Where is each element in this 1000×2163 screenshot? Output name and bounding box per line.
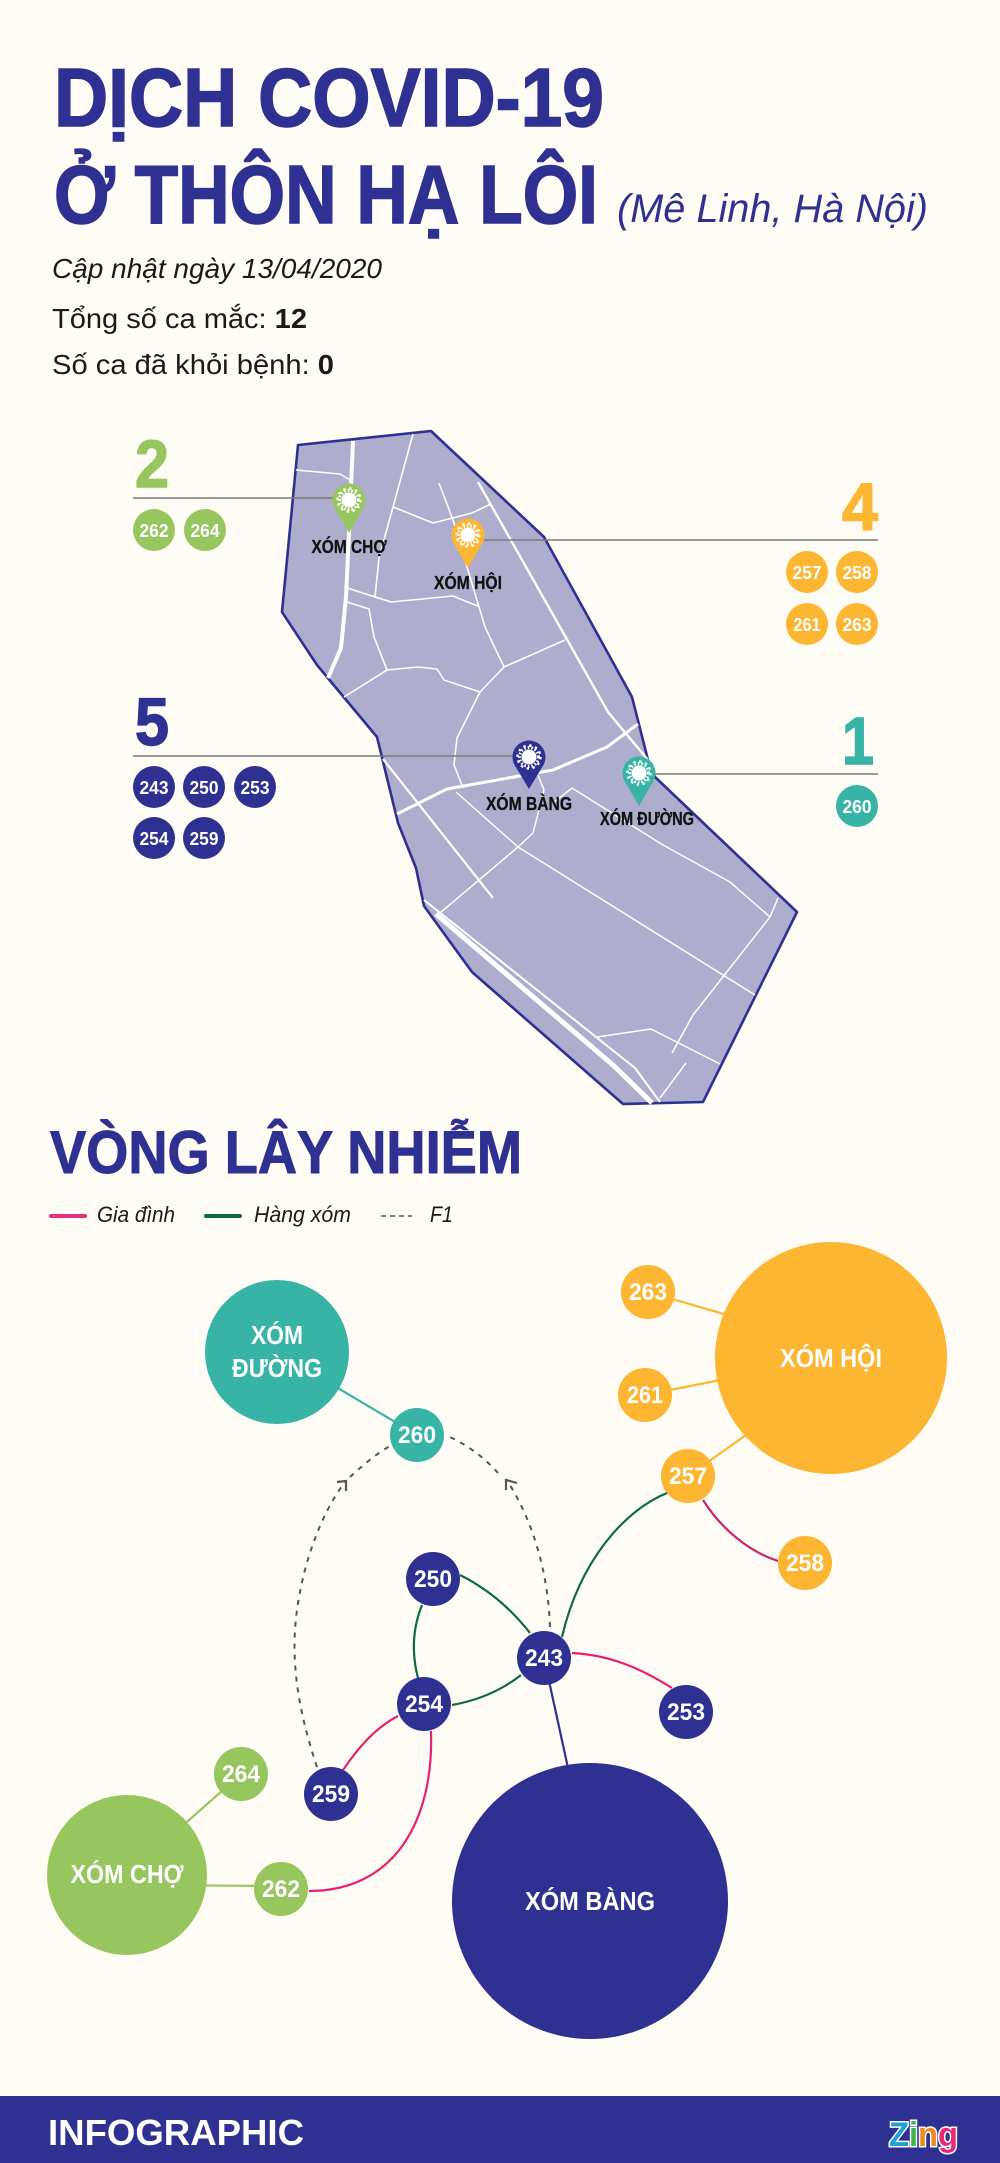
- count: Xóm Đường 1 case: 260: [842, 797, 872, 817]
- node: case 243: [517, 1631, 571, 1685]
- title: DỊCH COVID-19: [54, 51, 604, 144]
- footer band: [0, 2096, 1000, 2163]
- node: case 261: 261: [627, 1382, 663, 1409]
- node: case 264: [214, 1747, 268, 1801]
- node: case 262: 262: [262, 1876, 300, 1903]
- count: Xóm Bàng 5 cases: [133, 685, 276, 859]
- subtitle: location: (Mê Linh, Hà Nội): [617, 187, 928, 231]
- count: Xóm Chợ 2 cases: 2: [135, 427, 169, 502]
- count: Xóm Hội 4 cases: [786, 470, 878, 645]
- map panel: [133, 431, 878, 1104]
- arrow: 243 to 260: [506, 1480, 517, 1490]
- label: Xóm Hội: XÓM HỘI: [434, 572, 502, 593]
- pin: Xóm Chợ: [332, 484, 366, 533]
- node: case 253: [659, 1685, 713, 1739]
- count: Xóm Đường 1 case: 1: [842, 704, 874, 779]
- count: Xóm Chợ 2 cases: 262: [140, 521, 168, 541]
- legend: Hàng xóm: [254, 1202, 351, 1227]
- count: Xóm Bàng 5 cases: 254: [140, 829, 168, 849]
- node: case 260: [390, 1408, 444, 1462]
- pin: Xóm Bàng: [512, 741, 546, 789]
- recovered cases: Số ca đã khỏi bệnh: 0: [52, 349, 334, 380]
- node: Xóm Đường: ĐƯỜNG: [232, 1353, 322, 1383]
- node: case 258: 258: [786, 1550, 824, 1577]
- node: Xóm Đường: XÓM: [251, 1320, 303, 1350]
- node: case 263: [621, 1265, 675, 1319]
- node: case 253: 253: [667, 1699, 705, 1726]
- leader lines: [133, 498, 878, 774]
- pin: Xóm Hội: [452, 519, 484, 568]
- count: Xóm Chợ 2 cases: [133, 427, 226, 551]
- legend: Gia đình: [97, 1202, 175, 1227]
- title: [54, 51, 604, 241]
- count: Xóm Bàng 5 cases: 250: [190, 778, 218, 798]
- count: Xóm Hội 4 cases: 261: [794, 615, 820, 635]
- node: Xóm Hội: [715, 1242, 947, 1474]
- node: case 261: [618, 1368, 672, 1422]
- count: Xóm Hội 4 cases: 4: [842, 470, 878, 545]
- node: Xóm Đường: [205, 1280, 349, 1424]
- node: case 250: 250: [414, 1566, 452, 1593]
- map: roads: [296, 434, 778, 1103]
- node: Xóm Chợ: XÓM CHỢ: [70, 1859, 184, 1889]
- count: Xóm Chợ 2 cases: 264: [190, 521, 220, 541]
- footer label: INFOGRAPHIC: [48, 2112, 304, 2153]
- node: case 260: 260: [398, 1422, 436, 1449]
- count: Xóm Bàng 5 cases: 5: [135, 685, 169, 760]
- node: case 254: 254: [405, 1691, 444, 1718]
- network diagram: [47, 1242, 947, 2039]
- title: Ở THÔN HẠ LÔI: [54, 148, 598, 241]
- node: case 263: 263: [629, 1279, 667, 1306]
- arrow: 259 to 260: [337, 1481, 346, 1491]
- count: Xóm Hội 4 cases: 258: [842, 563, 872, 583]
- count: Xóm Đường 1 case: [836, 704, 878, 827]
- node: Xóm Hội: XÓM HỘI: [780, 1343, 882, 1373]
- node: case 259: 259: [312, 1781, 350, 1808]
- label: Xóm Bàng: XÓM BÀNG: [486, 793, 572, 814]
- links: [127, 1292, 831, 1891]
- node: case 259: [304, 1767, 358, 1821]
- heading: infection chain: VÒNG LÂY NHIỄM: [50, 1119, 522, 1186]
- count: Xóm Bàng 5 cases: 243: [140, 778, 168, 798]
- pin: Xóm Đường: [623, 757, 655, 806]
- node: case 264: 264: [222, 1761, 261, 1788]
- count: Xóm Bàng 5 cases: 259: [190, 829, 218, 849]
- legend: F1: [430, 1202, 453, 1227]
- count: Xóm Hội 4 cases: 257: [792, 563, 822, 583]
- update date: Cập nhật ngày 13/04/2020: [52, 253, 382, 284]
- label: Xóm Đường: XÓM ĐƯỜNG: [600, 808, 694, 829]
- node: case 257: 257: [669, 1463, 707, 1490]
- label: Xóm Chợ: XÓM CHỢ: [312, 536, 387, 557]
- node: Xóm Chợ: [47, 1795, 207, 1955]
- node: case 257: [661, 1449, 715, 1503]
- node: case 250: [406, 1552, 460, 1606]
- count: Xóm Bàng 5 cases: 253: [240, 778, 270, 798]
- count: Xóm Hội 4 cases: 263: [842, 615, 872, 635]
- node: case 254: [397, 1677, 451, 1731]
- total cases: Tổng số ca mắc: 12: [52, 303, 307, 334]
- node: case 243: 243: [525, 1645, 563, 1672]
- node: case 262: [254, 1862, 308, 1916]
- map: village outline: [282, 431, 797, 1104]
- node: Xóm Bàng: [452, 1763, 728, 2039]
- node: Xóm Bàng: XÓM BÀNG: [525, 1886, 655, 1916]
- legend: [51, 1202, 453, 1227]
- node: case 258: [778, 1536, 832, 1590]
- logo: Zing: Zing: [889, 2116, 958, 2154]
